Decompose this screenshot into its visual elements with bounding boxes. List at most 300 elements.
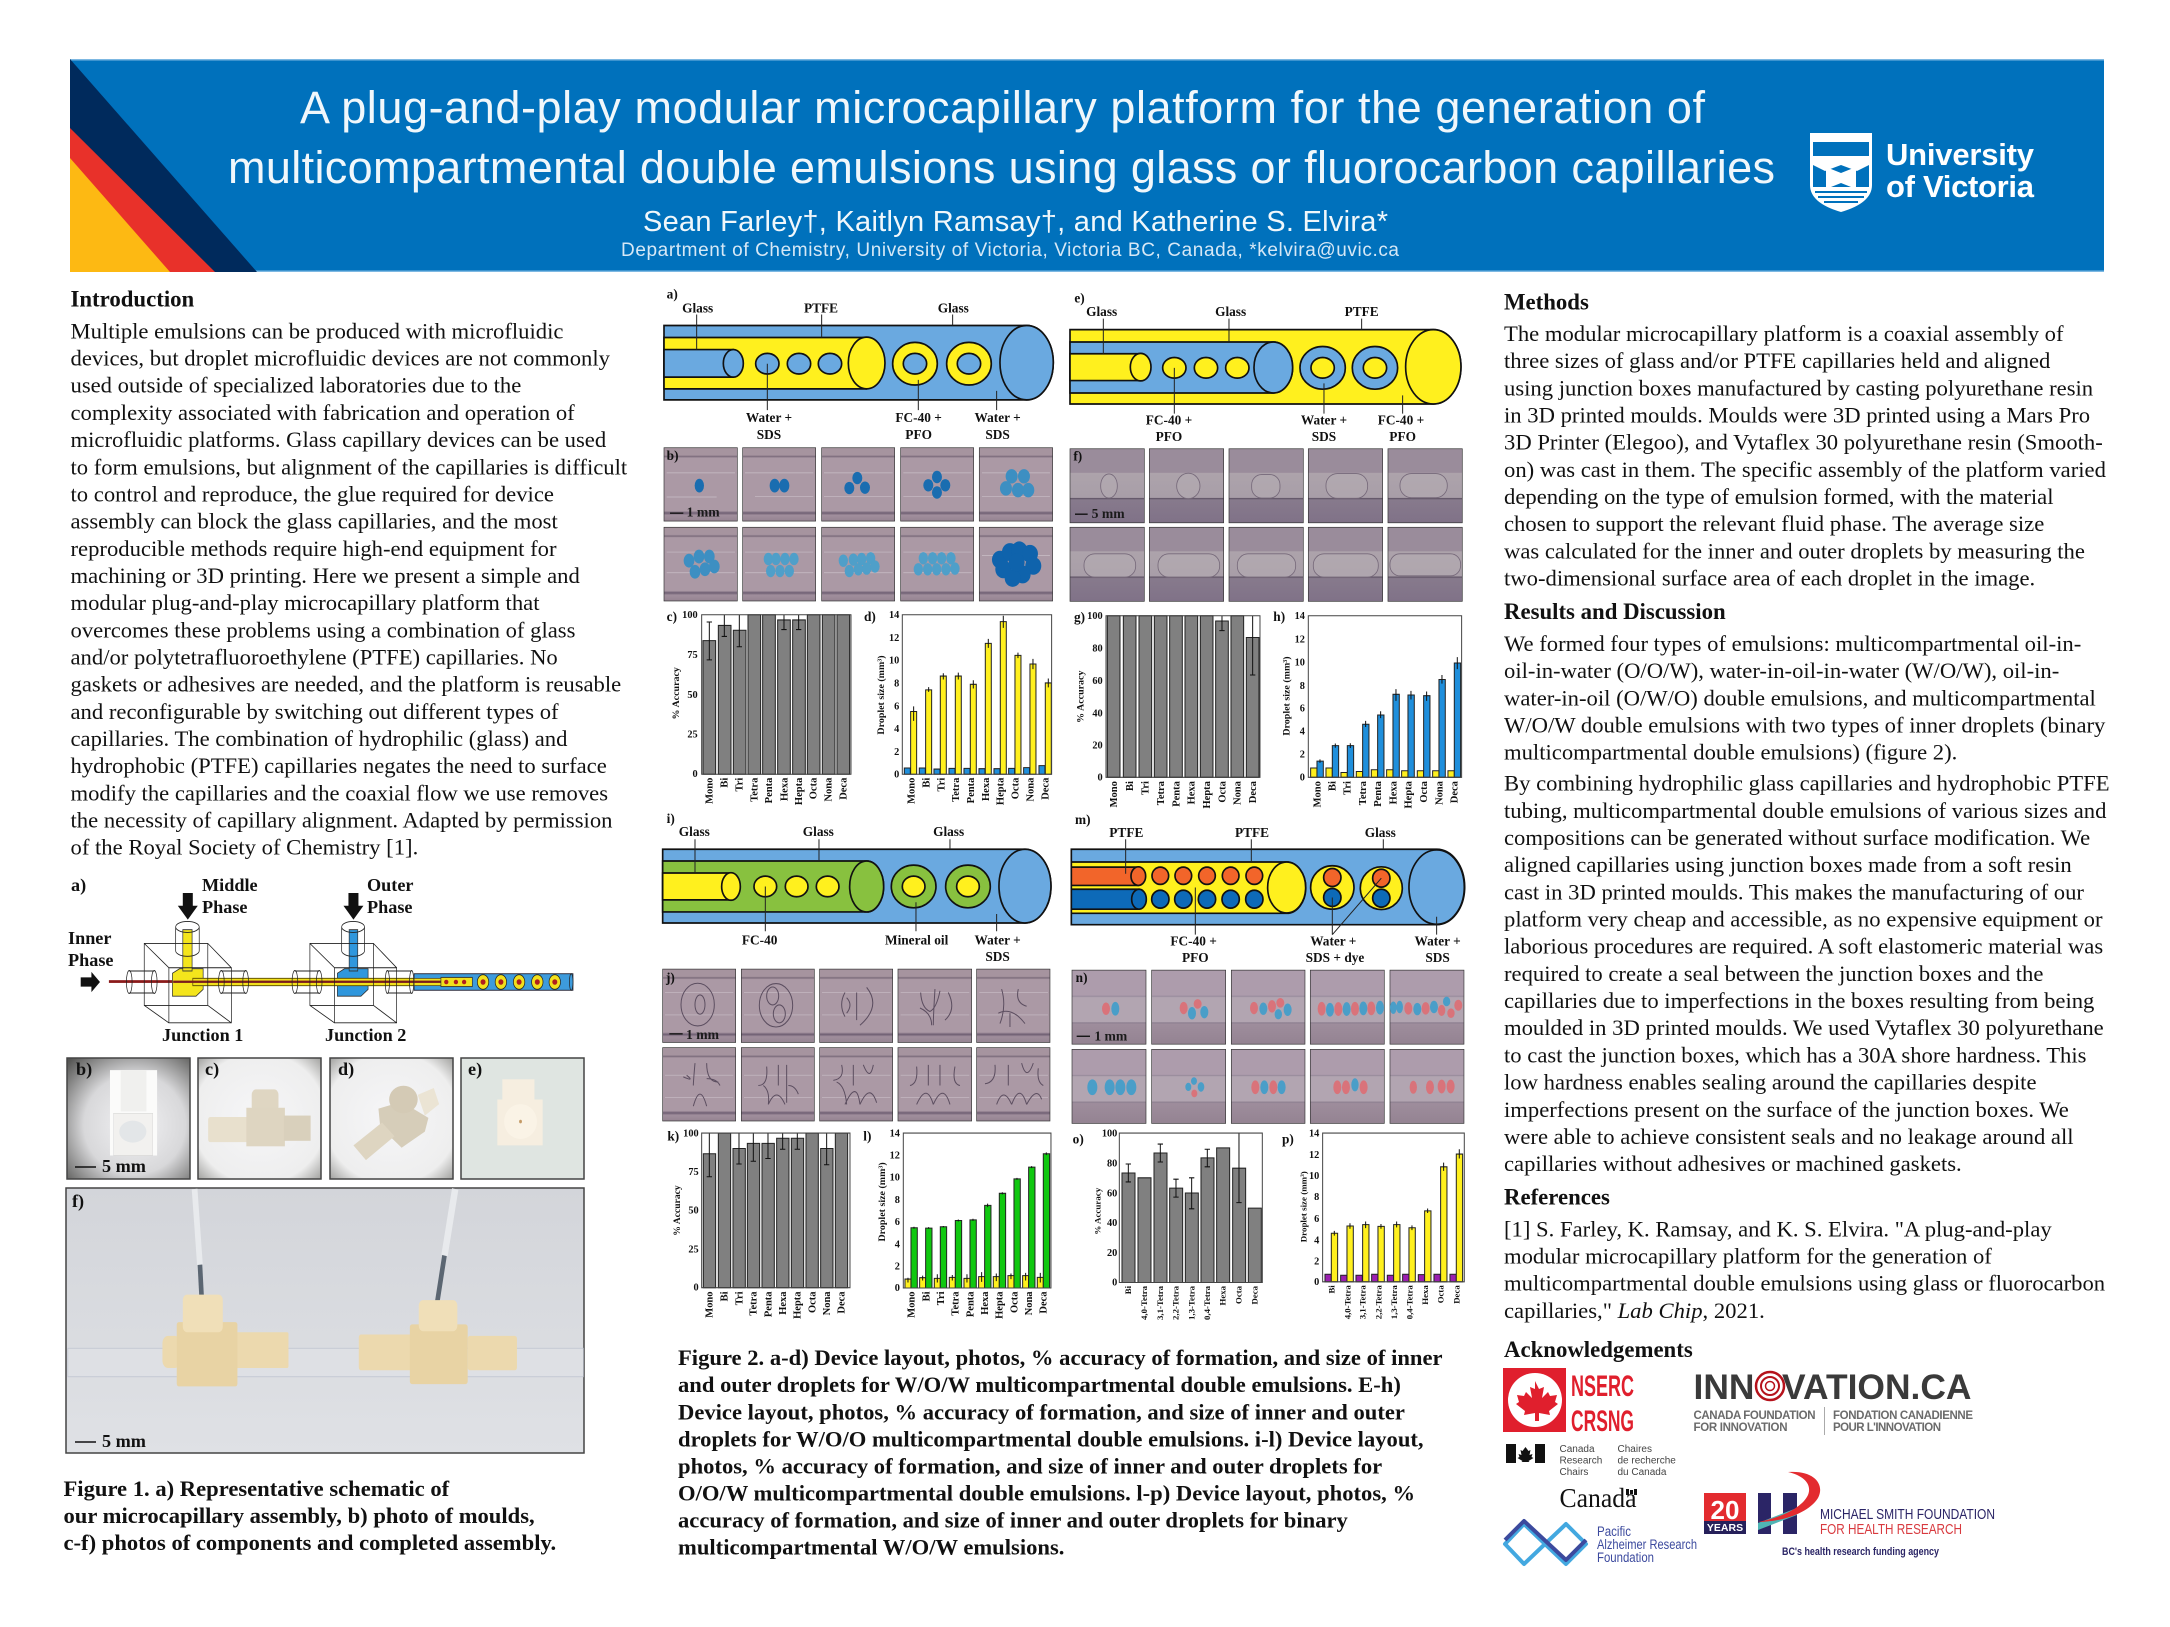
chart g: percent accuracy: Deca xyxy=(1248,781,1259,803)
text block: methods: The modular microcapillary platform is a coaxial assembly of xyxy=(1504,321,2064,346)
chart l: droplet size: Deca xyxy=(1039,1291,1050,1314)
text block: introduction: and reconfigurable by switching out different types of xyxy=(70,699,559,724)
panel: results and discussion xyxy=(1504,599,2110,1176)
chart k: percent accuracy: 100 xyxy=(683,1128,699,1140)
device layout a: SDS xyxy=(757,427,781,442)
chart o: percent accuracy: 0 xyxy=(1112,1277,1117,1289)
chart o: percent accuracy: Octa xyxy=(1234,1285,1244,1304)
chart g: percent accuracy: Tetra xyxy=(1156,781,1167,805)
schematic: microcapillary assembly: Middle xyxy=(202,875,258,895)
chart c: percent accuracy: Deca xyxy=(838,778,849,800)
chart d: droplet size: 8 xyxy=(894,679,899,690)
logo: Innovation.ca: CANADA FOUNDATION xyxy=(1694,1410,1816,1422)
photos f xyxy=(1070,448,1462,601)
logo: Canada Research Chairs: Chairs xyxy=(1560,1467,1588,1478)
chart h: droplet size: h) xyxy=(1273,609,1285,625)
logo: Pacific Alzheimer Research Foundation: Pacific xyxy=(1597,1524,1631,1539)
device layout a: Water + xyxy=(975,410,1021,425)
chart d: droplet size: Hexa xyxy=(981,778,992,801)
text block: discussion: imperfections present on the surface of the junction boxes. We xyxy=(1504,1097,2069,1122)
heading: results and discussion: Results and Discussion xyxy=(1504,599,1726,624)
chart l: droplet size: Bi xyxy=(921,1291,932,1301)
chart d: droplet size: 12 xyxy=(889,633,899,644)
device layout a: Glass xyxy=(682,300,713,315)
text block: methods: was calculated for the inner and outer droplets by measuring the xyxy=(1504,538,2085,563)
chart o: percent accuracy: 100 xyxy=(1102,1128,1117,1140)
schematic: microcapillary assembly: a) xyxy=(71,875,86,896)
logo: Innovation.ca xyxy=(1694,1368,1973,1435)
chart h: droplet size: 0 xyxy=(1300,772,1305,783)
chart d: droplet size: 4 xyxy=(894,724,900,735)
chart l: droplet size: Nona xyxy=(1024,1291,1035,1315)
device layout a: Water + xyxy=(746,410,792,425)
text block: references xyxy=(1504,1216,2105,1323)
photo: component c: c) xyxy=(205,1059,219,1080)
chart c: percent accuracy xyxy=(667,609,851,805)
chart h: droplet size: 8 xyxy=(1300,681,1305,692)
chart k: percent accuracy: Mono xyxy=(705,1291,716,1318)
text block: references: multicompartmental double emulsions using glass or fluorocarbon xyxy=(1504,1271,2105,1296)
photos n xyxy=(1072,970,1464,1123)
text block: references: modular microcapillary platform for the generation of xyxy=(1504,1244,1992,1269)
header banner xyxy=(70,59,2104,272)
chart c: percent accuracy: Tetra xyxy=(749,778,760,802)
device layout e: FC-40 + xyxy=(1146,412,1192,428)
chart g: percent accuracy xyxy=(1074,609,1260,809)
chart o: percent accuracy: 40 xyxy=(1107,1218,1117,1229)
chart c: percent accuracy: % Accuracy xyxy=(671,667,682,719)
photos f: f) xyxy=(1073,448,1082,465)
chart l: droplet size: Tetra xyxy=(951,1291,962,1316)
chart c: percent accuracy: 100 xyxy=(682,610,698,621)
device layout a: a) xyxy=(667,286,678,303)
photo: completed assembly: f) xyxy=(72,1191,84,1212)
logo: Canada Research Chairs: Chaires xyxy=(1618,1444,1652,1455)
device layout e: SDS xyxy=(1312,429,1336,444)
chart k: percent accuracy: Tri xyxy=(734,1291,745,1305)
device layout i: i) xyxy=(667,811,675,827)
text block: methods: in 3D printed moulds. Moulds were 3D printed using a Mars Pro xyxy=(1504,402,2090,427)
device layout a xyxy=(664,286,1053,442)
chart p: droplet size: 8 xyxy=(1314,1192,1319,1203)
chart h: droplet size: Nona xyxy=(1434,781,1445,805)
text block: discussion: required to create a seal between the junction boxes and the xyxy=(1504,961,2043,986)
photos j: j) xyxy=(665,970,675,986)
chart o: percent accuracy: 2,2-Tetra xyxy=(1171,1285,1181,1320)
text block: discussion: compositions can be generated without surface modification. We xyxy=(1504,825,2090,850)
schematic: microcapillary assembly: Outer xyxy=(367,875,413,895)
panel: acknowledgements xyxy=(1503,1337,1995,1565)
photo: mould xyxy=(67,1058,190,1179)
text block: introduction: of the Royal Society of Chemistry [1]. xyxy=(70,835,418,860)
chart g: percent accuracy: Octa xyxy=(1217,781,1228,803)
photo: completed assembly xyxy=(66,1188,584,1453)
chart k: percent accuracy xyxy=(667,1128,850,1319)
chart p: droplet size: 1,3-Tetra xyxy=(1389,1285,1399,1319)
chart o: percent accuracy: 1,3-Tetra xyxy=(1186,1285,1196,1320)
chart o: percent accuracy: Hexa xyxy=(1218,1285,1228,1305)
text block: introduction: assembly can block the glass capillaries, and the most xyxy=(70,509,558,534)
photo: mould: b) xyxy=(76,1059,92,1080)
logo: Innovation.ca: POUR L'INNOVATION xyxy=(1833,1422,1941,1434)
chart p: droplet size: Octa xyxy=(1436,1285,1446,1303)
chart p: droplet size: 10 xyxy=(1309,1171,1319,1182)
device layout a: PFO xyxy=(905,427,932,442)
photo: mould: 5 mm xyxy=(102,1156,146,1176)
logo: University of Victoria: of Victoria xyxy=(1886,169,2035,204)
chart g: percent accuracy: 0 xyxy=(1097,772,1103,783)
chart d: droplet size: Bi xyxy=(921,778,932,788)
title: multicompartmental double emulsions using glass or fluorocarbon capillaries xyxy=(228,142,1775,193)
chart h: droplet size: 12 xyxy=(1295,634,1305,645)
chart g: percent accuracy: Hexa xyxy=(1187,781,1198,804)
device layout e: FC-40 + xyxy=(1378,412,1424,428)
chart g: percent accuracy: 60 xyxy=(1092,676,1103,687)
logo: 20 years: 20 xyxy=(1711,1495,1739,1525)
chart l: droplet size xyxy=(863,1128,1051,1319)
text block: introduction: overcomes these problems using a combination of glass xyxy=(70,617,575,642)
device layout a: FC-40 + xyxy=(895,410,942,425)
text block: introduction: modular plug-and-play microcapillary platform that xyxy=(70,590,540,615)
chart d: droplet size: Droplet size (mm³) xyxy=(876,655,887,735)
chart h: droplet size: Tri xyxy=(1343,781,1354,795)
device layout i: Mineral oil xyxy=(885,932,949,947)
title: A plug-and-play modular microcapillary platform for the generation of xyxy=(300,82,1705,133)
text block: introduction: to form emulsions, but alignment of the capillaries is difficult xyxy=(70,454,628,479)
chart p: droplet size: Bi xyxy=(1327,1285,1337,1294)
logo: 20 years xyxy=(1704,1493,1746,1534)
chart l: droplet size: 6 xyxy=(895,1217,900,1228)
schematic: microcapillary assembly: Inner xyxy=(68,928,111,948)
figure 1 caption: c-f) photos of components and completed assembly. xyxy=(64,1530,556,1555)
figure 1 caption: our microcapillary assembly, b) photo of moulds, xyxy=(64,1503,535,1528)
chart p: droplet size: Hexa xyxy=(1420,1285,1430,1305)
device layout e: e) xyxy=(1074,290,1085,306)
chart h: droplet size: 2 xyxy=(1300,750,1305,761)
chart p: droplet size: 6 xyxy=(1314,1214,1319,1225)
chart k: percent accuracy: Penta xyxy=(763,1291,774,1317)
chart c: percent accuracy: Penta xyxy=(764,778,775,803)
chart p: droplet size: 2,2-Tetra xyxy=(1373,1285,1383,1319)
logo: Innovation.ca: INNOVATION.CA xyxy=(1694,1368,1972,1407)
schematic: microcapillary assembly: Junction 2 xyxy=(325,1025,406,1045)
chart d: droplet size: Penta xyxy=(966,778,977,803)
chart l: droplet size: Octa xyxy=(1009,1291,1020,1313)
chart g: percent accuracy: Mono xyxy=(1109,781,1120,807)
text block: emulsion types: W/O/W double emulsions with two types of inner droplets (binary xyxy=(1504,712,2106,737)
chart g: percent accuracy: 20 xyxy=(1092,741,1103,752)
text block: introduction: capillaries. The combination of hydrophilic (glass) and xyxy=(70,726,568,751)
chart p: droplet size: 4 xyxy=(1314,1235,1320,1246)
text block: introduction: microfluidic platforms. Glass capillary devices can be used xyxy=(70,427,607,452)
text block: discussion xyxy=(1504,771,2110,1176)
photos b: 1 mm xyxy=(687,505,720,521)
chart g: percent accuracy: 80 xyxy=(1092,643,1103,655)
chart p: droplet size: 14 xyxy=(1309,1128,1320,1140)
device layout m: PTFE xyxy=(1235,825,1269,840)
figure 2 caption: photos, % accuracy of formation, and size of inner and outer droplets for xyxy=(678,1453,1382,1478)
figure 1 caption xyxy=(64,1476,556,1555)
chart c: percent accuracy: Nona xyxy=(824,778,835,802)
chart h: droplet size: Deca xyxy=(1450,781,1461,803)
logo: Innovation.ca: FONDATION CANADIENNE xyxy=(1833,1410,1973,1422)
chart k: percent accuracy: Hepta xyxy=(793,1291,804,1319)
text block: methods xyxy=(1504,321,2107,590)
chart h: droplet size: Mono xyxy=(1312,781,1323,807)
chart h: droplet size: Octa xyxy=(1419,781,1430,803)
chart g: percent accuracy: Bi xyxy=(1125,781,1136,791)
chart l: droplet size: Penta xyxy=(965,1291,976,1317)
chart k: percent accuracy: Bi xyxy=(720,1291,731,1301)
device layout i: Glass xyxy=(933,824,964,839)
chart d: droplet size: d) xyxy=(864,609,876,625)
device layout a: Glass xyxy=(938,300,969,315)
chart k: percent accuracy: k) xyxy=(667,1128,679,1145)
device layout m xyxy=(1071,812,1465,965)
logo: 20 years: YEARS xyxy=(1707,1522,1743,1534)
chart h: droplet size: Bi xyxy=(1328,781,1339,791)
chart h: droplet size: Hepta xyxy=(1403,781,1414,809)
photos j xyxy=(663,969,1050,1121)
logo: Canada wordmark: Canada xyxy=(1560,1483,1637,1513)
chart k: percent accuracy: 50 xyxy=(688,1206,699,1217)
text block: introduction: hydrophobic (PTFE) capillaries negates the need to surface xyxy=(70,753,607,778)
text block: discussion: moulded in 3D printed moulds. We used Vytaflex 30 polyurethane xyxy=(1504,1015,2104,1040)
chart c: percent accuracy: 25 xyxy=(687,729,698,740)
logo: Canada Research Chairs xyxy=(1506,1444,1676,1478)
chart k: percent accuracy: 75 xyxy=(688,1167,699,1178)
text block: emulsion types xyxy=(1504,631,2106,765)
chart p: droplet size xyxy=(1282,1128,1464,1319)
chart k: percent accuracy: Hexa xyxy=(778,1291,789,1315)
device layout i: Water + xyxy=(975,932,1021,947)
heading: acknowledgements: Acknowledgements xyxy=(1504,1337,1693,1362)
logo: Michael Smith Foundation: FOR HEALTH RESEARCH xyxy=(1820,1522,1962,1538)
device layout e: PTFE xyxy=(1345,304,1379,319)
text block: methods: three sizes of glass and/or PTFE capillaries held and aligned xyxy=(1504,348,2051,373)
chart p: droplet size: p) xyxy=(1282,1131,1294,1147)
text block: emulsion types: water-in-oil (O/W/O) double emulsions, and multicompartmental xyxy=(1504,685,2096,710)
photos n: n) xyxy=(1076,970,1088,986)
chart k: percent accuracy: Nona xyxy=(822,1291,833,1315)
photo: component d xyxy=(330,1058,453,1179)
chart l: droplet size: Tri xyxy=(936,1291,947,1305)
device layout m: PFO xyxy=(1182,950,1209,965)
figure 2 quadrant: W/O/O e-h xyxy=(1070,290,1462,809)
photo: component e xyxy=(461,1058,584,1179)
chart l: droplet size: 14 xyxy=(890,1128,901,1140)
chart d: droplet size: 2 xyxy=(894,747,899,758)
text block: introduction: the necessity of capillary alignment. Adapted by permission xyxy=(70,807,612,832)
chart d: droplet size: 0 xyxy=(894,770,899,781)
device layout e: Glass xyxy=(1215,304,1246,319)
chart g: percent accuracy: % Accuracy xyxy=(1075,670,1086,723)
figure 2 caption: Device layout, photos, % accuracy of formation, and size of inner and outer xyxy=(678,1399,1405,1424)
chart h: droplet size: Penta xyxy=(1373,781,1384,807)
figure 2 quadrant: binary W/O/W m-p xyxy=(1071,812,1465,1320)
chart l: droplet size: 8 xyxy=(895,1195,900,1206)
text block: methods: two-dimensional surface area of each droplet in the image. xyxy=(1504,565,2035,590)
logo: NSERC CRSNG: CRSNG xyxy=(1571,1405,1634,1438)
logo: Canada Research Chairs: de recherche xyxy=(1618,1456,1676,1466)
logo: Canada Research Chairs: du Canada xyxy=(1618,1467,1667,1478)
panel: references xyxy=(1504,1184,2105,1323)
chart k: percent accuracy: 25 xyxy=(688,1244,699,1256)
panel: methods xyxy=(1504,289,2107,590)
text block: discussion: low hardness enables sealing around the capillaries despite xyxy=(1504,1070,2037,1095)
panel: introduction xyxy=(70,286,628,860)
chart c: percent accuracy: Bi xyxy=(720,778,731,788)
chart d: droplet size: Mono xyxy=(906,778,917,804)
chart h: droplet size: Droplet size (mm³) xyxy=(1281,656,1292,736)
logo: Michael Smith Foundation: BC's health research funding agency xyxy=(1782,1546,1940,1558)
photos n: 1 mm xyxy=(1094,1030,1128,1045)
figure 1 xyxy=(64,875,584,1555)
text block: introduction: complexity associated with fabrication and operation of xyxy=(70,400,575,425)
chart h: droplet size: 6 xyxy=(1300,703,1305,715)
device layout m: m) xyxy=(1075,812,1091,828)
chart g: percent accuracy: 100 xyxy=(1087,611,1103,622)
photos f: 5 mm xyxy=(1092,507,1125,522)
chart k: percent accuracy: Tetra xyxy=(749,1291,760,1316)
schematic: microcapillary assembly: Phase xyxy=(202,897,247,917)
chart o: percent accuracy: 3,1-Tetra xyxy=(1155,1285,1165,1320)
photo: component e: e) xyxy=(468,1059,482,1080)
figure 2 caption: O/O/W multicompartmental double emulsions. l-p) Device layout, photos, % xyxy=(678,1480,1415,1505)
text block: methods: depending on the type of emulsion formed, with the material xyxy=(1504,484,2054,509)
text block: discussion: to cast the junction boxes, which has a 30A shore hardness. This xyxy=(1504,1042,2086,1067)
chart l: droplet size: 10 xyxy=(890,1172,900,1184)
chart d: droplet size xyxy=(864,609,1052,805)
schematic: microcapillary assembly xyxy=(68,875,573,1045)
chart l: droplet size: l) xyxy=(863,1128,871,1145)
logo: NSERC CRSNG xyxy=(1503,1368,1634,1438)
logo: Canada Research Chairs: Research xyxy=(1560,1456,1602,1466)
device layout i: Glass xyxy=(679,824,710,839)
logo: University of Victoria xyxy=(1810,133,2035,212)
chart k: percent accuracy: Octa xyxy=(807,1291,818,1313)
chart l: droplet size: 12 xyxy=(890,1150,900,1162)
chart p: droplet size: 0,4-Tetra xyxy=(1404,1285,1414,1319)
chart c: percent accuracy: Tri xyxy=(735,778,746,791)
chart g: percent accuracy: Penta xyxy=(1171,781,1182,807)
chart c: percent accuracy: c) xyxy=(667,609,677,625)
logo: University of Victoria: University xyxy=(1886,137,2035,172)
logo: Innovation.ca: FOR INNOVATION xyxy=(1694,1422,1788,1434)
chart h: droplet size xyxy=(1273,609,1462,809)
chart c: percent accuracy: Hexa xyxy=(779,778,790,801)
device layout m: SDS xyxy=(1425,950,1450,965)
text block: emulsion types: multicompartmental double emulsions) (figure 2). xyxy=(1504,740,1957,765)
chart d: droplet size: Octa xyxy=(1011,778,1022,799)
photos j: 1 mm xyxy=(686,1028,719,1043)
device layout m: SDS + dye xyxy=(1306,950,1364,965)
chart h: droplet size: 14 xyxy=(1295,611,1306,622)
chart o: percent accuracy: % Accuracy xyxy=(1093,1187,1103,1235)
chart g: percent accuracy: g) xyxy=(1074,609,1085,626)
figure 2 caption: and outer droplets for W/O/W multicompartmental double emulsions. E-h) xyxy=(678,1372,1401,1397)
chart o: percent accuracy: Bi xyxy=(1123,1285,1133,1294)
chart o: percent accuracy: o) xyxy=(1073,1131,1084,1147)
chart o: percent accuracy: 4,0-Tetra xyxy=(1139,1285,1149,1320)
chart p: droplet size: 12 xyxy=(1309,1150,1319,1161)
heading: references: References xyxy=(1504,1184,1610,1209)
figure 2 quadrant: O/O/W i-l xyxy=(663,811,1051,1319)
text block: discussion: were able to achieve consistent seals and no leakage around all xyxy=(1504,1124,2074,1149)
chart k: percent accuracy: Deca xyxy=(837,1291,848,1314)
chart h: droplet size: 10 xyxy=(1295,658,1305,669)
device layout e: PFO xyxy=(1389,429,1416,444)
chart h: droplet size: Tetra xyxy=(1358,781,1369,805)
photo: component d: d) xyxy=(338,1059,354,1080)
device layout i: Glass xyxy=(803,824,834,839)
text block: references: [1] S. Farley, K. Ramsay, and K. S. Elvira. "A plug-and-play xyxy=(1504,1216,2052,1241)
chart d: droplet size: Nona xyxy=(1026,778,1037,802)
text block: methods: using junction boxes manufactured by casting polyurethane resin xyxy=(1504,375,2093,400)
figure 1 caption: Figure 1. a) Representative schematic of xyxy=(64,1476,450,1501)
device layout a: SDS xyxy=(985,427,1010,442)
text block: discussion: platform very cheap and accessible, as no expensive equipment or xyxy=(1504,907,2103,932)
device layout e: Glass xyxy=(1086,304,1117,319)
chart k: percent accuracy: % Accuracy xyxy=(673,1185,683,1236)
figure 2 quadrant: W/O/W a-d xyxy=(664,286,1053,805)
text block: introduction: used outside of specialized laboratories due to the xyxy=(70,373,521,398)
chart p: droplet size: 2 xyxy=(1314,1256,1319,1267)
logo: Pacific Alzheimer Research Foundation xyxy=(1505,1521,1697,1565)
device layout e xyxy=(1070,290,1461,444)
text block: introduction: devices, but droplet microfluidic devices are not commonly xyxy=(70,346,611,371)
chart o: percent accuracy: 20 xyxy=(1107,1248,1117,1259)
chart l: droplet size: 2 xyxy=(895,1261,900,1272)
chart p: droplet size: 0 xyxy=(1314,1277,1319,1288)
chart k: percent accuracy: 0 xyxy=(693,1282,699,1293)
text block: emulsion types: We formed four types of emulsions: multicompartmental oil-in- xyxy=(1504,631,2081,656)
device layout m: Water + xyxy=(1310,933,1357,949)
device layout m: Water + xyxy=(1415,933,1461,949)
chart l: droplet size: Droplet size (mm³) xyxy=(877,1162,888,1242)
text block: discussion: cast in 3D printed moulds. This makes the manufacturing of our xyxy=(1504,879,2084,904)
chart p: droplet size: 3,1-Tetra xyxy=(1358,1285,1368,1319)
chart o: percent accuracy: 80 xyxy=(1107,1158,1117,1170)
chart h: droplet size: 4 xyxy=(1300,726,1306,738)
chart o: percent accuracy: 0,4-Tetra xyxy=(1202,1285,1212,1320)
chart o: percent accuracy: Deca xyxy=(1249,1285,1259,1304)
logo: Pacific Alzheimer Research Foundation: Alzheimer Research xyxy=(1597,1537,1697,1552)
text block: introduction: gaskets or adhesives are needed, and the platform is reusable xyxy=(70,672,621,697)
chart c: percent accuracy: Hepta xyxy=(794,778,805,805)
chart l: droplet size: 4 xyxy=(895,1239,901,1250)
chart g: percent accuracy: Tri xyxy=(1141,781,1152,795)
schematic: microcapillary assembly: Junction 1 xyxy=(162,1025,243,1045)
device layout m: PTFE xyxy=(1109,825,1143,840)
chart c: percent accuracy: 50 xyxy=(687,690,698,701)
text block: introduction: to control and reproduce, the glue required for device xyxy=(70,481,554,506)
text block: methods: 3D Printer (Elegoo), and Vytaflex 30 polyurethane resin (Smooth- xyxy=(1504,430,2103,455)
chart l: droplet size: Hexa xyxy=(980,1291,991,1315)
logo: Michael Smith Foundation xyxy=(1758,1472,1995,1558)
logo: NSERC CRSNG: NSERC xyxy=(1571,1370,1634,1403)
chart c: percent accuracy: 0 xyxy=(692,769,698,780)
chart l: droplet size: Mono xyxy=(907,1291,918,1318)
text block: discussion: By combining hydrophilic glass capillaries and hydrophobic PTFE xyxy=(1504,771,2110,796)
chart h: droplet size: Hexa xyxy=(1388,781,1399,804)
title xyxy=(228,82,1775,193)
chart d: droplet size: 14 xyxy=(889,610,900,621)
logo: Pacific Alzheimer Research Foundation: Foundation xyxy=(1597,1550,1654,1565)
text block: introduction xyxy=(70,318,628,860)
chart d: droplet size: Deca xyxy=(1041,778,1052,800)
photo: completed assembly: 5 mm xyxy=(102,1431,146,1451)
